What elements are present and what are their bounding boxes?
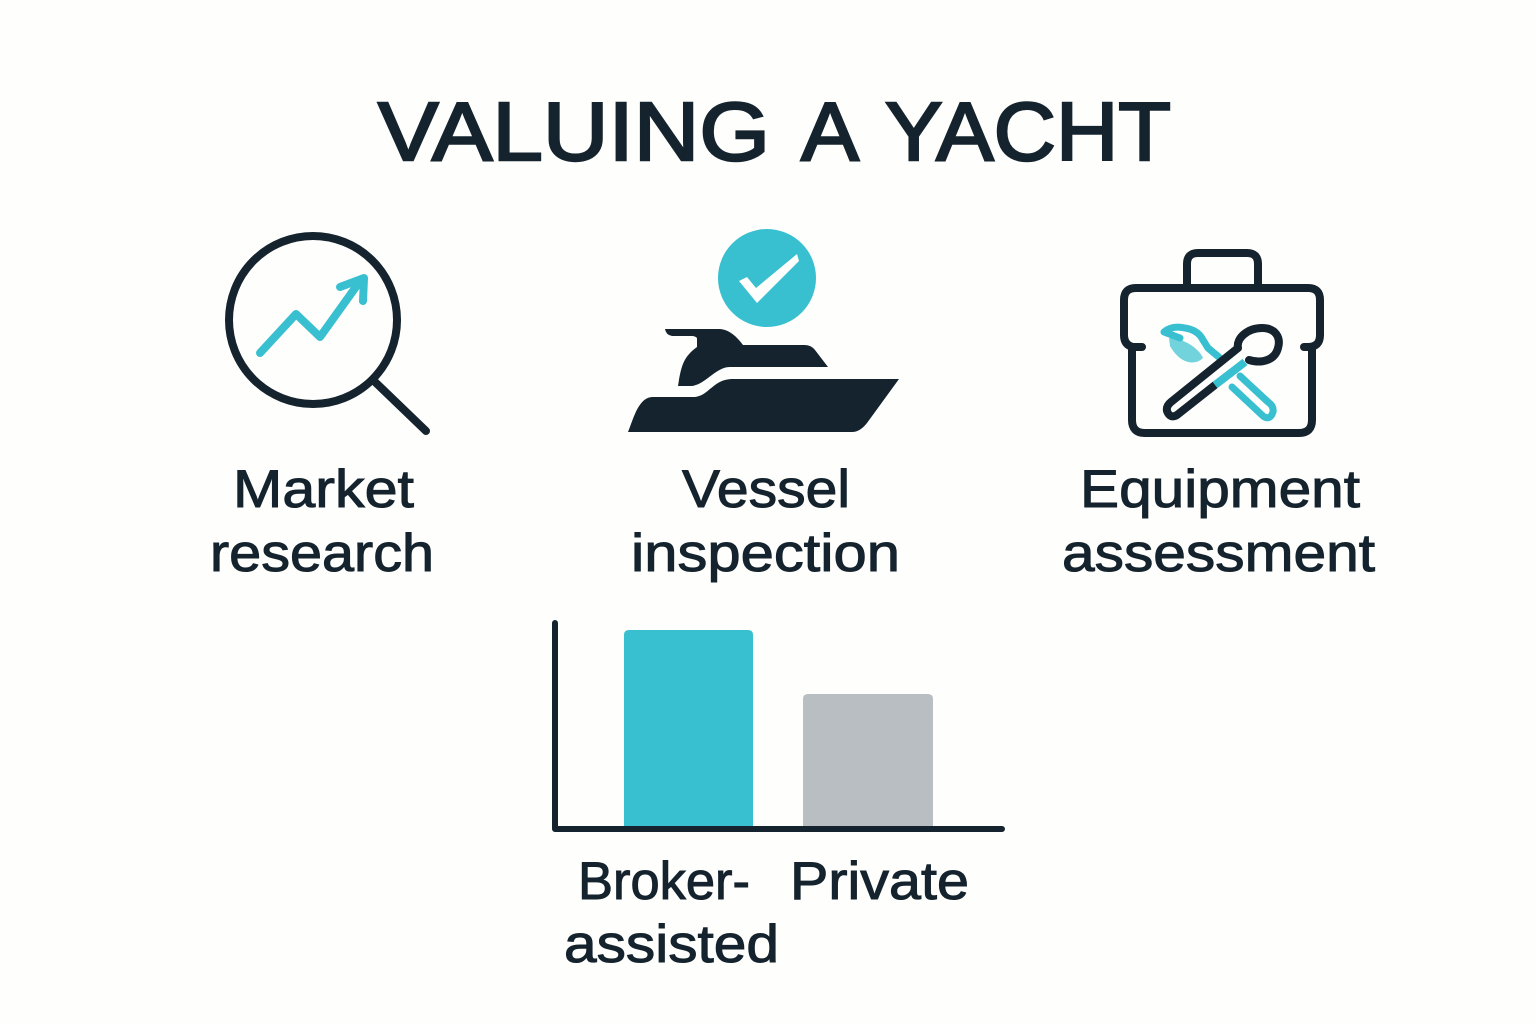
title: YACHT <box>885 85 1171 178</box>
bar: private <box>803 694 933 826</box>
label: broker-assisted <box>564 852 779 974</box>
bar: broker-assisted <box>624 630 753 826</box>
label: market research: Market <box>233 460 414 519</box>
label: broker-assisted: Broker- <box>578 852 750 911</box>
chart axes <box>555 623 1002 829</box>
label: equipment assessment: Equipment <box>1080 460 1360 519</box>
title <box>378 85 1171 178</box>
icon: yacht with check badge <box>628 229 899 432</box>
panel: vessel inspection <box>628 229 900 583</box>
label: vessel inspection: Vessel <box>682 460 850 519</box>
label: broker-assisted: assisted <box>564 915 779 974</box>
icon: magnifying glass with rising trend <box>229 236 426 431</box>
title: VALUING <box>378 85 770 178</box>
label: equipment assessment: assessment <box>1062 524 1375 583</box>
panel: market research <box>210 236 434 583</box>
label: market research <box>210 460 434 583</box>
panel: equipment assessment <box>1062 253 1375 583</box>
label: vessel inspection: inspection <box>631 524 900 583</box>
title: A <box>801 85 860 178</box>
bar chart: broker-assisted vs private <box>555 623 1002 974</box>
label: vessel inspection <box>631 460 900 583</box>
label: equipment assessment <box>1062 460 1375 583</box>
icon: toolbox with crossed tools <box>1124 253 1320 433</box>
label: private: Private <box>790 852 969 911</box>
label: market research: research <box>210 524 434 583</box>
